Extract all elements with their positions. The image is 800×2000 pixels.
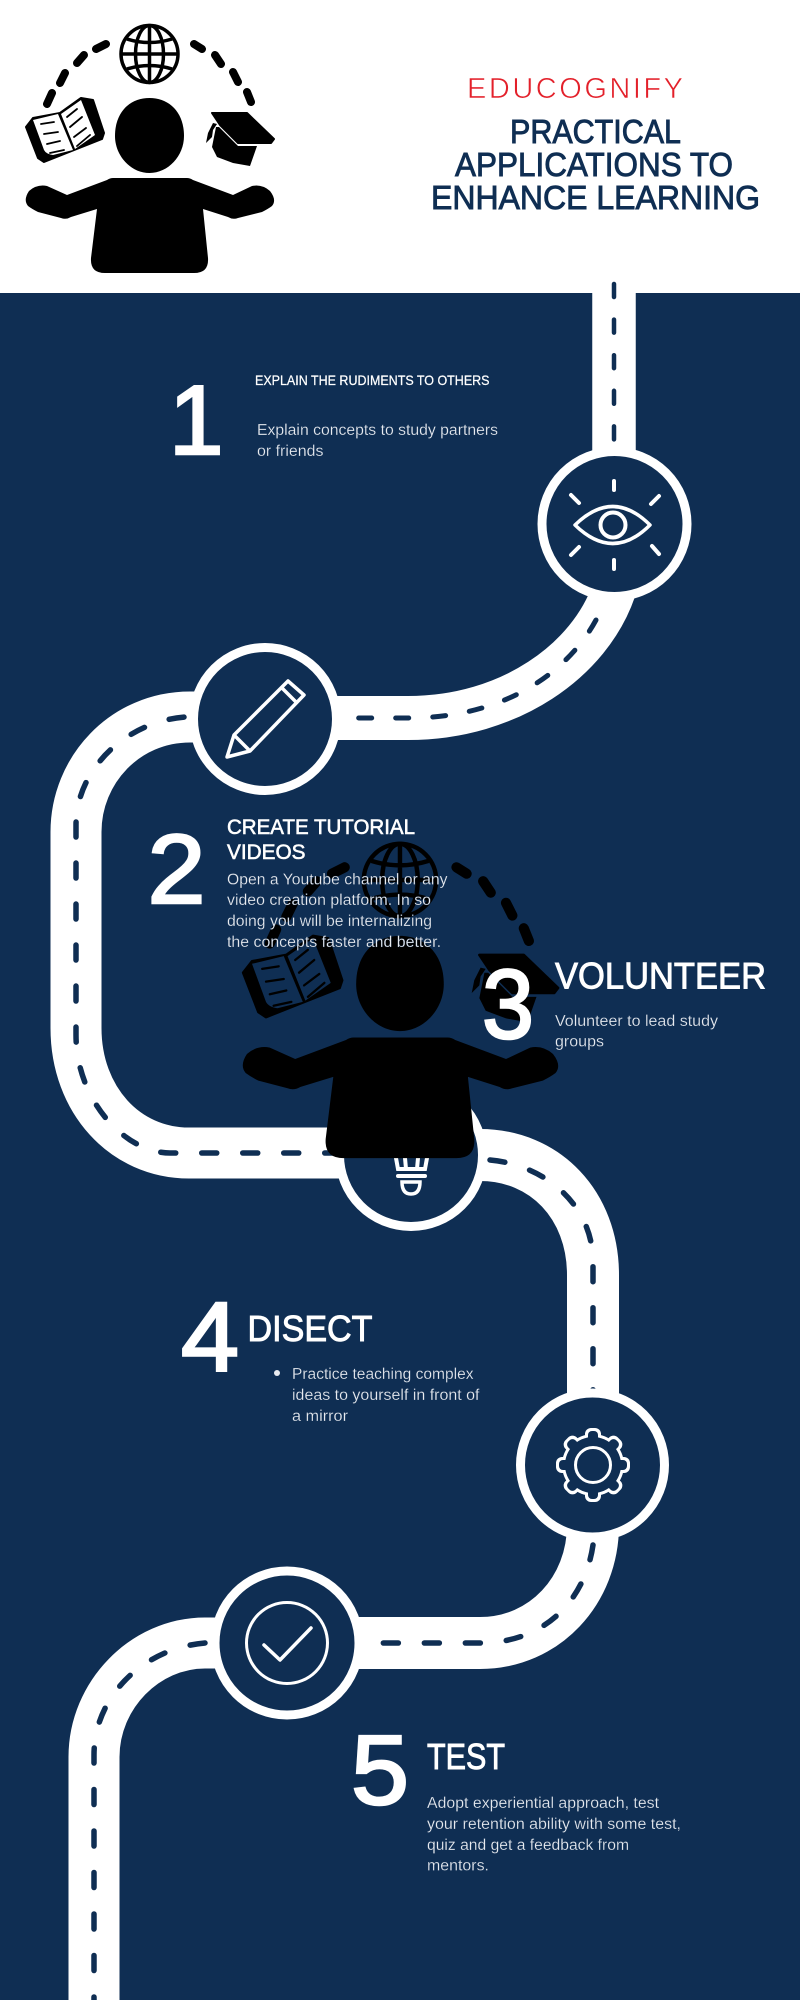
step 3 text: groups	[555, 1034, 604, 1050]
step 2 text: Open a Youtube channel or any	[227, 872, 448, 888]
step 3 text: Volunteer to lead study	[555, 1013, 718, 1030]
step 5 marker: check icon	[215, 1571, 359, 1715]
step 1 text: or friends	[257, 443, 324, 460]
step 1 marker: eye icon	[542, 452, 687, 596]
step 4 text	[181, 1282, 480, 1425]
step 4 text: 4	[181, 1282, 239, 1392]
step 2 text: CREATE TUTORIAL	[227, 815, 415, 839]
step 1 text: Explain concepts to study partners	[257, 422, 498, 439]
step 3 text: VOLUNTEER	[555, 956, 766, 996]
title	[431, 114, 760, 217]
step 2 text: the concepts faster and better.	[227, 934, 441, 951]
step 3 marker: light bulb icon	[340, 1084, 482, 1226]
step 5 text: quiz and get a feedback from	[427, 1837, 629, 1854]
step 2 text	[148, 814, 448, 951]
step 2 text: 2	[148, 814, 206, 924]
title: ENHANCE LEARNING	[431, 180, 760, 217]
header illustration: person juggling learning icons	[26, 25, 274, 273]
road network	[76, 280, 614, 2000]
step 5 text	[351, 1715, 681, 1874]
overlay illustration: enlarged person figure	[243, 843, 558, 1158]
step 2 text: doing you will be internalizing	[227, 913, 432, 930]
step 5 text: your retention ability with some test,	[427, 1816, 681, 1833]
title: PRACTICAL	[510, 114, 681, 151]
step 1 text: EXPLAIN THE RUDIMENTS TO OTHERS	[255, 372, 490, 388]
step 4 text: DISECT	[248, 1308, 373, 1349]
step 4 text: Practice teaching complex	[292, 1366, 474, 1383]
step 4 marker: gear icon	[520, 1393, 664, 1537]
step 3 text	[482, 949, 766, 1059]
step 4 text: a mirror	[292, 1408, 348, 1425]
brand name: EDUCOGNIFY	[467, 73, 683, 105]
step 5 text: TEST	[427, 1736, 505, 1777]
step 2 text: VIDEOS	[227, 840, 306, 864]
step 5 text: Adopt experiential approach, test	[427, 1795, 660, 1812]
step 5 text: 5	[351, 1715, 409, 1825]
step 5 text: mentors.	[427, 1858, 489, 1874]
step 2 text: video creation platform. In so	[227, 892, 431, 909]
step 2 marker: pencil icon	[194, 648, 336, 790]
step 1 text	[169, 365, 498, 475]
step 1 text: 1	[169, 365, 224, 475]
step 3 text: 3	[482, 949, 534, 1059]
step 4 text: ideas to yourself in front of	[292, 1387, 480, 1404]
title: APPLICATIONS TO	[455, 147, 733, 184]
